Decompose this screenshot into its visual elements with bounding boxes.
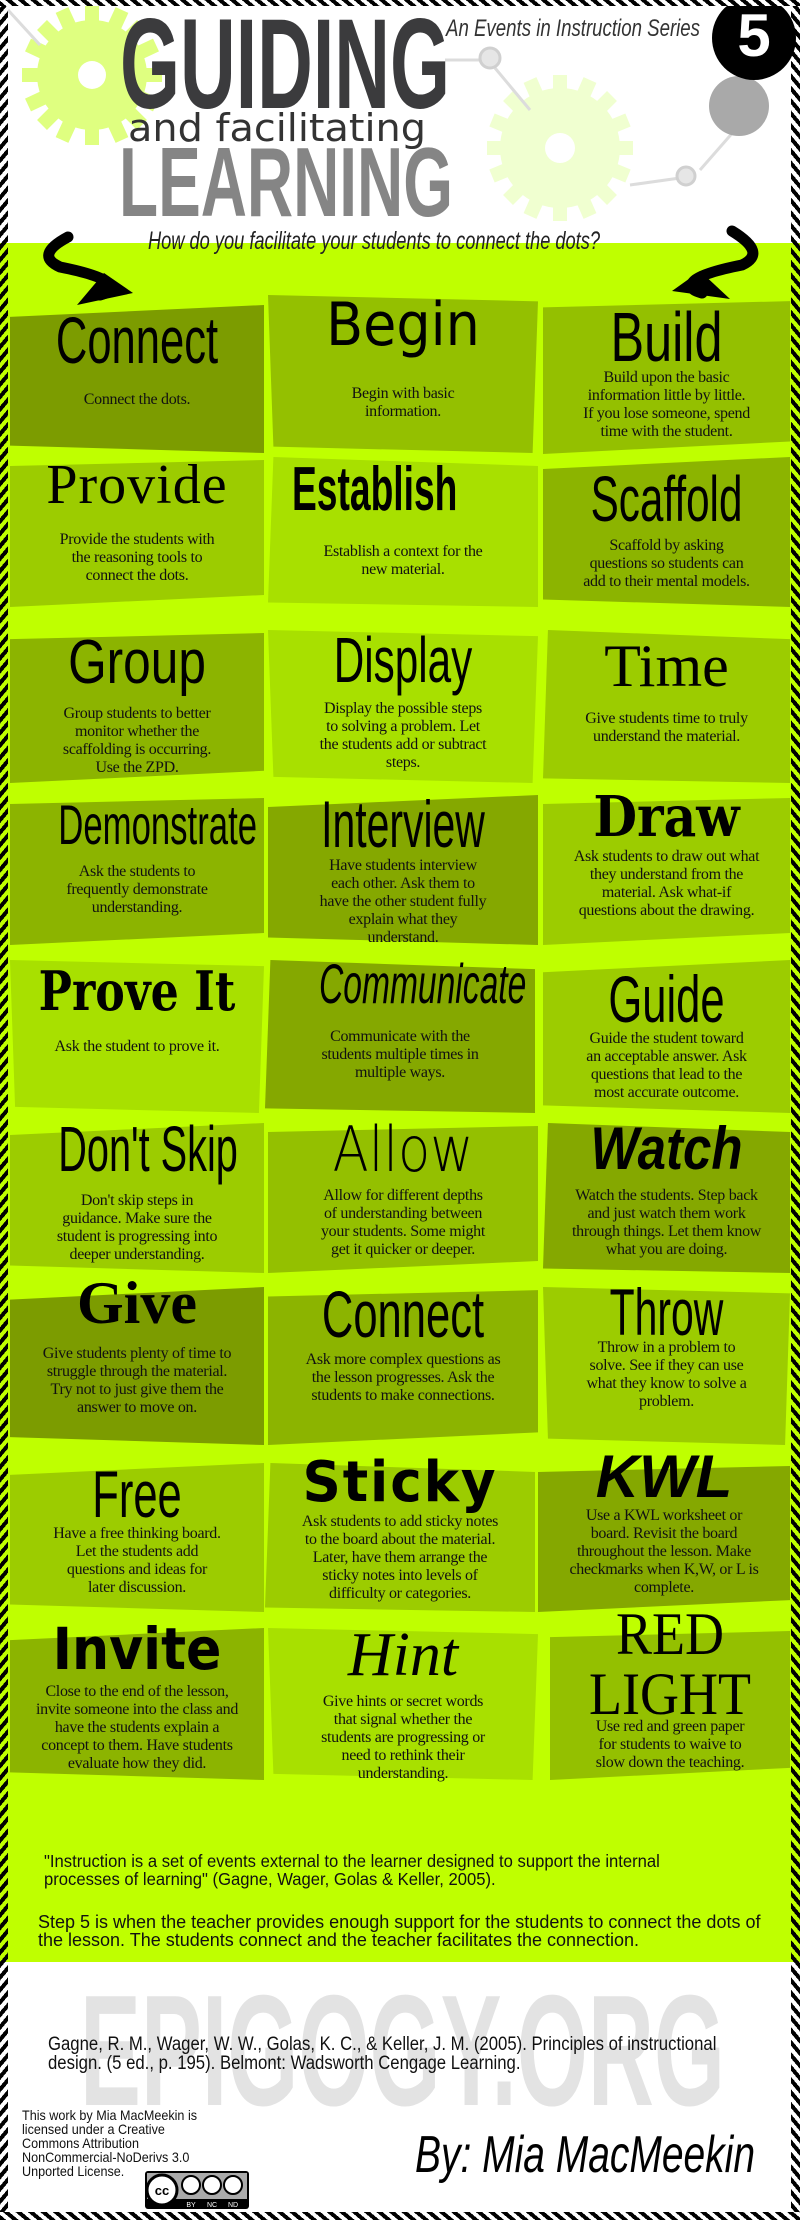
text: Free: Have a free thinking board. xyxy=(53,1525,221,1542)
text: Free: Let the students add xyxy=(76,1543,198,1560)
text: Time xyxy=(585,710,748,745)
green background area xyxy=(0,243,800,1962)
panel: Invite xyxy=(10,1615,264,1780)
heading: Group: Group xyxy=(68,628,206,697)
text: Invite: Close to the end of the lesson, xyxy=(45,1683,229,1700)
text: Hint: Give hints or secret words xyxy=(323,1693,483,1710)
text: Group: monitor whether the xyxy=(75,723,199,740)
text: Display: Display the possible steps xyxy=(324,700,482,717)
text: Throw: problem. xyxy=(639,1393,694,1410)
text: Throw xyxy=(586,1339,747,1410)
license text xyxy=(22,2107,197,2179)
panel: KWL xyxy=(538,1443,790,1612)
quote text block: "Instruction is a set of events external to the learner designed to support the internal xyxy=(44,1851,660,1871)
text: Build: If you lose someone, spend xyxy=(583,405,750,422)
text: Prove It: Ask the student to prove it. xyxy=(55,1038,219,1055)
text: Allow: get it quicker or deeper. xyxy=(331,1241,475,1258)
text: Establish: Establish a context for the xyxy=(324,543,482,560)
panel: Sticky xyxy=(265,1450,535,1612)
text: Interview: Have students interview xyxy=(329,857,477,874)
text: Invite: concept to them. Have students xyxy=(41,1737,233,1754)
text: Guide: most accurate outcome. xyxy=(594,1084,739,1101)
text: Time: understand the material. xyxy=(593,728,740,745)
text: Demonstrate xyxy=(66,863,208,916)
text: Communicate: students multiple times in xyxy=(321,1046,479,1063)
panel: Connect (second) xyxy=(268,1277,538,1445)
heading: Free: Free xyxy=(92,1457,182,1531)
badge: number 5: 5 xyxy=(737,2,771,69)
text: Interview xyxy=(320,857,487,946)
text: Invite: evaluate how they did. xyxy=(68,1755,206,1772)
text: Display: steps. xyxy=(386,754,420,771)
text: Guide: an acceptable answer. Ask xyxy=(586,1048,747,1065)
icon: creative commons badge: BY xyxy=(186,2202,196,2209)
heading: Establish: Establish xyxy=(292,455,457,524)
heading: RED LIGHT: LIGHT xyxy=(589,1661,751,1727)
panel: Connect xyxy=(10,303,264,453)
heading: Display: Display xyxy=(334,624,472,696)
text: Guide xyxy=(586,1030,747,1101)
heading: KWL: KWL xyxy=(596,1443,732,1510)
heading: Give: Give xyxy=(77,1270,197,1336)
text: Scaffold xyxy=(583,537,750,590)
text: Build: information little by little. xyxy=(588,387,745,404)
panel: Scaffold xyxy=(543,457,790,607)
text: Connect: students to make connections. xyxy=(311,1387,495,1404)
title: LEARNING xyxy=(119,127,453,237)
text: Give: struggle through the material. xyxy=(47,1363,227,1380)
text: Allow: Allow for different depths xyxy=(323,1187,483,1204)
text: KWL: complete. xyxy=(634,1579,694,1596)
text: Sticky: difficulty or categories. xyxy=(329,1585,471,1602)
title: An Events in Instruction Series xyxy=(444,15,700,42)
text: Sticky: Later, have them arrange the xyxy=(313,1549,487,1566)
text: Draw: material. Ask what-if xyxy=(602,884,731,901)
title: How do you facilitate your students to connect the dots? xyxy=(148,227,600,255)
license text: Unported License. xyxy=(22,2163,124,2179)
icon: creative commons badge xyxy=(145,2171,249,2209)
text: Establish: new material. xyxy=(361,561,445,578)
text: Draw: Ask students to draw out what xyxy=(574,848,759,865)
panel: Communicate xyxy=(265,952,535,1113)
text: Sticky: to the board about the material. xyxy=(305,1531,495,1548)
panel: Don't Skip xyxy=(10,1113,264,1273)
text: Sticky xyxy=(302,1513,498,1602)
text: Draw: they understand from the xyxy=(590,866,743,883)
panel: Provide xyxy=(10,454,264,607)
text: Establish xyxy=(324,543,482,578)
text: Throw: solve. See if they can use xyxy=(590,1357,743,1374)
heading: Begin: Begin xyxy=(326,290,480,360)
text: Allow xyxy=(321,1187,486,1258)
icon: creative commons badge: ND xyxy=(228,2202,238,2209)
text: Don't Skip: deeper understanding. xyxy=(70,1246,204,1263)
text: Watch: and just watch them work xyxy=(587,1205,746,1222)
step 5 text block xyxy=(38,1912,761,1950)
text: Display xyxy=(320,700,486,771)
text: Allow: your students. Some might xyxy=(321,1223,485,1240)
heading: Watch: Watch xyxy=(590,1115,743,1182)
text: Don't Skip: Don't skip steps in xyxy=(81,1192,193,1209)
heading: Allow: Allow xyxy=(333,1113,473,1186)
text: Build: time with the student. xyxy=(600,423,733,440)
heading: Communicate: Communicate xyxy=(319,952,526,1015)
text: Scaffold: add to their mental models. xyxy=(583,573,750,590)
text: Give: Give students plenty of time to xyxy=(43,1345,231,1362)
text: KWL: throughout the lesson. Make xyxy=(577,1543,751,1560)
text: Connect: Ask more complex questions as xyxy=(306,1351,500,1368)
heading: Prove It: Prove It xyxy=(39,959,235,1023)
text: Group: Use the ZPD. xyxy=(95,759,179,776)
text: Scaffold: questions so students can xyxy=(590,555,743,572)
text: Guide: questions that lead to the xyxy=(591,1066,742,1083)
panel: Watch xyxy=(543,1115,790,1273)
text: Hint: that signal whether the xyxy=(334,1711,472,1728)
text: Group: scaffolding is occurring. xyxy=(63,741,211,758)
text: Hint: need to rethink their xyxy=(342,1747,464,1764)
text: KWL: board. Revisit the board xyxy=(591,1525,737,1542)
license text: NonCommercial-NoDerivs 3.0 xyxy=(22,2149,189,2165)
arrow: left xyxy=(43,232,133,305)
text: Communicate xyxy=(321,1028,479,1081)
heading: Connect: Connect xyxy=(322,1277,484,1351)
text: Group xyxy=(63,705,211,776)
text: Demonstrate: understanding. xyxy=(92,899,182,916)
text: Scaffold: Scaffold by asking xyxy=(609,537,724,554)
text: Provide xyxy=(60,531,214,584)
text: Interview: explain what they xyxy=(349,911,457,928)
panel: Build xyxy=(543,298,790,454)
text: Provide: Provide the students with xyxy=(60,531,214,548)
text: Give: answer to move on. xyxy=(77,1399,197,1416)
panel: RED LIGHT xyxy=(550,1601,790,1780)
text: Group: Group students to better xyxy=(64,705,210,722)
panel: Throw xyxy=(543,1275,790,1445)
text: Watch: Watch the students. Step back xyxy=(575,1187,758,1204)
text: Connect: Connect the dots. xyxy=(84,391,190,408)
text: Guide: Guide the student toward xyxy=(589,1030,744,1047)
panel: Display xyxy=(268,624,538,783)
text: Draw: questions about the drawing. xyxy=(579,902,754,919)
text: Throw: Throw in a problem to xyxy=(598,1339,735,1356)
panel: Group xyxy=(10,628,264,783)
text: Allow: of understanding between xyxy=(324,1205,482,1222)
text: Invite xyxy=(36,1683,238,1772)
text: Demonstrate: frequently demonstrate xyxy=(66,881,208,898)
license text: licensed under a Creative xyxy=(22,2121,165,2137)
text: Don't Skip xyxy=(57,1192,217,1263)
citation xyxy=(48,2034,716,2074)
quote text block: processes of learning" (Gagne, Wager, Golas & Keller, 2005). xyxy=(44,1869,496,1889)
citation: design. (5 ed., p. 195). Belmont: Wadsworth Cengage Learning. xyxy=(48,2053,520,2074)
text: Time: Give students time to truly xyxy=(585,710,748,727)
zigzag borders xyxy=(0,0,8,2220)
heading: Draw: Draw xyxy=(593,784,740,850)
text: Give xyxy=(43,1345,231,1416)
heading: Hint: Hint xyxy=(348,1621,458,1689)
text: Interview: understand. xyxy=(368,929,438,946)
text: Sticky: sticky notes into levels of xyxy=(322,1567,478,1584)
heading: Provide: Provide xyxy=(46,454,228,516)
title xyxy=(119,0,700,255)
panel: Begin xyxy=(268,290,538,453)
heading: Scaffold: Scaffold xyxy=(591,463,742,535)
text: Provide: the reasoning tools to xyxy=(72,549,202,566)
step 5 text block: Step 5 is when the teacher provides enough support for the students to connect the dots of xyxy=(38,1912,760,1932)
text: Interview: have the other student fully xyxy=(320,893,486,910)
license text: Commons Attribution xyxy=(22,2135,139,2151)
heading: Time: Time xyxy=(604,633,729,699)
text: Connect: the lesson progresses. Ask the xyxy=(312,1369,494,1386)
heading: Guide: Guide xyxy=(608,962,725,1036)
panel: Establish xyxy=(268,455,538,607)
text: Hint: understanding. xyxy=(358,1765,448,1782)
heading: Throw: Throw xyxy=(610,1275,723,1349)
heading: Don't Skip: Don't Skip xyxy=(58,1113,238,1185)
text: Build xyxy=(583,369,750,440)
heading: Connect: Connect xyxy=(56,303,218,377)
heading: Demonstrate: Demonstrate xyxy=(58,793,257,856)
text: Give: Try not to just give them the xyxy=(51,1381,223,1398)
quote text block xyxy=(44,1851,660,1889)
text: Begin xyxy=(352,385,454,420)
heading: RED LIGHT xyxy=(589,1601,751,1727)
text: Build: Build upon the basic xyxy=(604,369,730,386)
text: Don't Skip: guidance. Make sure the xyxy=(62,1210,212,1227)
heading: Interview: Interview xyxy=(321,787,485,861)
text: Throw: what they know to solve a xyxy=(586,1375,747,1392)
header illustration: gears and dots xyxy=(7,6,732,221)
text: Free: later discussion. xyxy=(88,1579,186,1596)
text: RED LIGHT xyxy=(596,1718,744,1771)
panel: Hint xyxy=(268,1621,538,1782)
badge: number 5 xyxy=(712,0,796,80)
heading: RED LIGHT: RED xyxy=(616,1601,724,1667)
text: Display: to solving a problem. Let xyxy=(326,718,480,735)
text: Invite: have the students explain a xyxy=(55,1719,219,1736)
text: Hint xyxy=(321,1693,486,1782)
heading: Sticky: Sticky xyxy=(303,1450,497,1515)
text: RED LIGHT: Use red and green paper xyxy=(596,1718,744,1735)
text: Don't Skip: student is progressing into xyxy=(57,1228,217,1245)
citation: Gagne, R. M., Wager, W. W., Golas, K. C., & Keller, J. M. (2005). Principles of instructional xyxy=(48,2034,716,2055)
title: and facilitating xyxy=(128,106,426,150)
text: Draw xyxy=(574,848,760,919)
text: Invite: invite someone into the class and xyxy=(36,1701,238,1718)
text: RED LIGHT: slow down the teaching. xyxy=(596,1754,744,1771)
panel: Prove It xyxy=(10,959,264,1113)
text: Hint: students are progressing or xyxy=(321,1729,485,1746)
text: Begin: Begin with basic xyxy=(352,385,454,402)
panel: Time xyxy=(543,630,790,783)
text: KWL xyxy=(569,1507,759,1596)
license text: This work by Mia MacMeekin is xyxy=(22,2107,197,2123)
text: Communicate: multiple ways. xyxy=(355,1064,445,1081)
text: Watch: what you are doing. xyxy=(606,1241,727,1258)
icon: creative commons badge: cc xyxy=(155,2183,169,2198)
text: Connect xyxy=(306,1351,500,1404)
panel: Demonstrate xyxy=(10,793,264,945)
heading: Build: Build xyxy=(610,298,723,376)
step 5 text block: the lesson. The students connect and the teacher facilitates the connection. xyxy=(38,1930,639,1950)
panel: Free xyxy=(10,1457,264,1612)
arrow: right xyxy=(672,226,758,299)
text: KWL: Use a KWL worksheet or xyxy=(586,1507,742,1524)
panel: Allow xyxy=(268,1113,538,1273)
text: Demonstrate: Ask the students to xyxy=(79,863,195,880)
icon: gray dot xyxy=(709,76,769,136)
heading: Invite: Invite xyxy=(53,1615,221,1683)
text: Sticky: Ask students to add sticky notes xyxy=(302,1513,498,1530)
panel: Guide xyxy=(543,960,790,1113)
panel: Give xyxy=(10,1270,264,1445)
text: Begin: information. xyxy=(365,403,441,420)
text: Watch xyxy=(572,1187,762,1258)
text: Communicate: Communicate with the xyxy=(330,1028,470,1045)
text: Free: questions and ideas for xyxy=(67,1561,207,1578)
text: Provide: connect the dots. xyxy=(86,567,188,584)
text: Free xyxy=(53,1525,221,1596)
text: Watch: through things. Let them know xyxy=(572,1223,761,1240)
icon: creative commons badge: NC xyxy=(207,2202,217,2209)
text: Interview: each other. Ask them to xyxy=(331,875,475,892)
text: RED LIGHT: for students to waive to xyxy=(598,1736,742,1753)
panel: Draw xyxy=(543,784,790,945)
text: KWL: checkmarks when K,W, or L is xyxy=(569,1561,759,1578)
text: Display: the students add or subtract xyxy=(320,736,486,753)
panel: Interview xyxy=(268,787,538,946)
